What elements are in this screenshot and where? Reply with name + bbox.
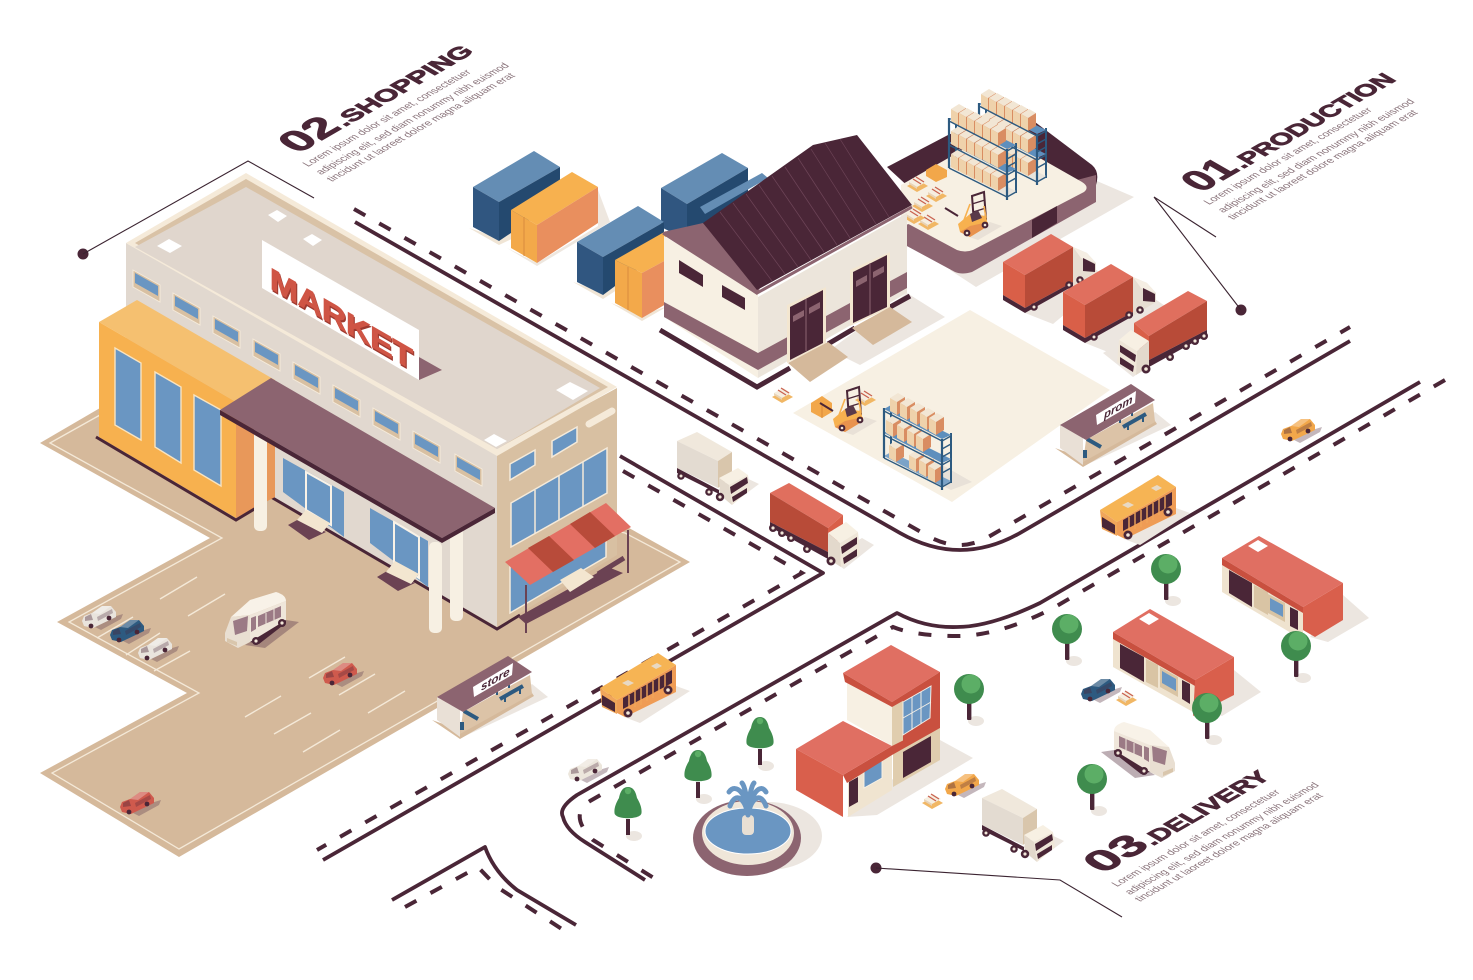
deck pallets	[904, 164, 947, 230]
vehicle: blue car near house	[1081, 679, 1122, 703]
entrance glass and doors	[283, 458, 428, 591]
heading: 03 delivery	[1073, 767, 1276, 879]
text: shopping body: Lorem ipsum dolor sit amet, consectetuer	[300, 68, 475, 169]
vehicle: red car	[323, 663, 364, 687]
yard shelf shadow	[895, 458, 972, 490]
icon: pallet near house	[922, 794, 943, 809]
heading: 02 shopping: .SHOPPING	[327, 41, 479, 130]
right wall	[497, 388, 617, 627]
heading: 01 production: .PRODUCTION	[1225, 69, 1401, 172]
icon: pallet stack	[811, 396, 832, 418]
upper roof	[843, 645, 940, 702]
road: delivery road dashed line	[580, 380, 1445, 885]
deck door	[1032, 206, 1057, 238]
deck forklift	[945, 192, 1002, 240]
panel: house B	[1113, 609, 1261, 716]
icon: pallet behind forklift	[855, 391, 876, 406]
wall base	[271, 497, 520, 629]
text: shopping body: adipiscing elit, sed diam nonummy nibh euismod	[313, 61, 512, 177]
panel: rear loading deck	[887, 89, 1134, 287]
container: blue 3	[661, 153, 768, 240]
icon: small trolley	[772, 388, 793, 403]
ground floor	[893, 728, 940, 787]
road: upper road dashed line	[354, 209, 1350, 545]
heading: 03 delivery: 03	[1073, 828, 1159, 879]
vehicle: small white car	[568, 759, 609, 783]
right wall windows	[510, 427, 607, 613]
warehouse ground and ramps	[660, 293, 945, 387]
container: blue 1	[469, 151, 560, 245]
panel: shipping containers	[469, 151, 768, 321]
market sign: MARKET	[270, 262, 413, 378]
warehouse roof	[663, 135, 912, 295]
vehicle: parked white car	[82, 606, 123, 630]
heading: 03 delivery: .DELIVERY	[1135, 767, 1276, 849]
road: lower junction dashed line	[405, 867, 568, 933]
panel: market plaza ground	[40, 408, 690, 857]
lower block	[796, 721, 892, 775]
icon: pallet near blue car	[1116, 691, 1137, 706]
panel: big house	[796, 645, 973, 817]
text: production body: adipiscing elit, sed diam nonummy nibh euismod	[1215, 97, 1418, 215]
vehicle: parked blue car	[110, 620, 151, 644]
text: production body: tincidunt ut laoreet dolore magna aliquam erat	[1225, 108, 1421, 222]
icon: yard shelf	[884, 393, 951, 490]
heading: 01 production: 01	[1171, 152, 1249, 198]
heading: 02 shopping	[268, 41, 479, 159]
upper windows row	[133, 270, 482, 486]
panel: store bus stop	[432, 656, 548, 739]
road: middle road dashed line	[317, 471, 802, 850]
vehicle: orange bus	[600, 653, 690, 723]
upper storey	[847, 683, 892, 746]
container: blue 2	[573, 206, 664, 299]
icon: fountain	[693, 783, 822, 876]
warehouse windows	[679, 260, 745, 310]
vehicle: red car lower	[120, 792, 161, 816]
warehouse left wall	[664, 236, 758, 378]
awning and small porch	[505, 503, 631, 633]
vehicle: orange bus upper	[1100, 475, 1190, 545]
panel: prom bus stop	[1055, 384, 1171, 467]
vehicle: red truck on road	[769, 483, 874, 569]
front wall	[126, 243, 497, 627]
icon: pine trees	[614, 717, 774, 841]
heading: 01 production	[1171, 69, 1401, 198]
text: production body: Lorem ipsum dolor sit amet, consectetuer	[1201, 106, 1376, 207]
vehicle: yellow car near house	[945, 774, 986, 798]
warehouse door left	[787, 287, 826, 363]
panel: yard	[793, 310, 1110, 502]
vehicle: red truck 2	[1063, 264, 1168, 354]
market sign: MARKET	[271, 264, 414, 380]
callout: delivery leader	[870, 862, 1122, 917]
deck shelf front	[949, 104, 1016, 200]
text: delivery body: adipiscing elit, sed diam nonummy nibh euismod	[1122, 781, 1322, 897]
panel: warehouse building	[660, 135, 945, 387]
panel: store bus stop: store	[481, 665, 510, 694]
icon: yard forklift	[820, 387, 877, 435]
callout: shopping leader	[78, 161, 314, 260]
market sign	[262, 240, 442, 380]
icon: round trees	[954, 554, 1311, 816]
vehicle: white delivery truck	[982, 789, 1064, 862]
red band	[843, 722, 940, 783]
vehicle: red truck 3	[1103, 291, 1208, 377]
panel: house A	[1222, 536, 1369, 642]
vehicle: white van on plaza	[225, 592, 299, 648]
warehouse door right	[850, 252, 890, 326]
container: orange 2	[611, 231, 668, 321]
road: upper road solid line	[355, 222, 1350, 550]
warehouse band	[664, 272, 907, 370]
callout: production leader	[1154, 197, 1246, 316]
panel: prom bus stop: prom	[1103, 393, 1133, 423]
vehicle: yellow car on road	[1281, 419, 1322, 443]
roof	[126, 173, 617, 456]
text: delivery body: tincidunt ut laoreet dolore magna aliquam erat	[1132, 791, 1326, 904]
road: middle road solid line	[323, 456, 823, 860]
columns and canopy	[220, 378, 495, 633]
container: orange 1	[507, 172, 610, 266]
warehouse ramps	[788, 307, 912, 382]
vehicle: parked white car	[138, 638, 179, 662]
heading: 02 shopping: 02	[268, 110, 351, 159]
text: shopping body: tincidunt ut laoreet dolore magna aliquam erat	[324, 71, 518, 184]
vehicle: red truck 1	[1003, 234, 1108, 324]
text: delivery body: Lorem ipsum dolor sit amet, consectetuer	[1109, 788, 1284, 889]
warehouse right wall	[758, 213, 907, 378]
road: delivery road solid line	[562, 382, 1420, 880]
air conditioner	[589, 411, 612, 424]
vehicle: white truck on road	[677, 432, 759, 505]
vehicle: delivery van	[1101, 722, 1175, 778]
deck shelf back	[979, 89, 1046, 185]
road: lower junction solid line	[392, 847, 576, 925]
orange block	[96, 300, 275, 520]
panel: market building	[96, 173, 631, 633]
